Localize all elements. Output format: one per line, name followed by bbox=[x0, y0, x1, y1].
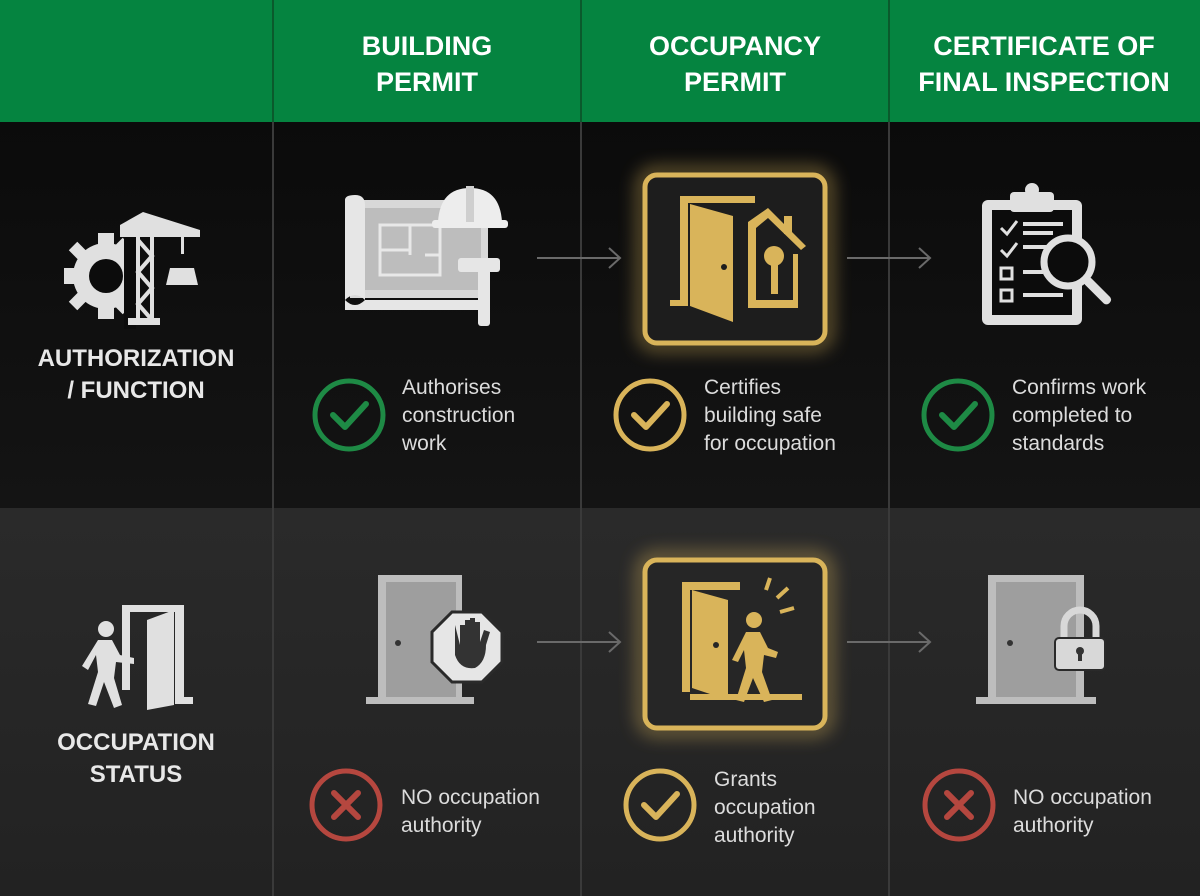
status: building permit row 1: Authorises bbox=[402, 376, 501, 399]
icon: occupancy door with walking person (glowing) bbox=[643, 558, 827, 730]
icon: gear and crane bbox=[64, 212, 200, 329]
row label: occupation status: STATUS bbox=[90, 761, 182, 788]
header: column titles: BUILDING bbox=[362, 31, 492, 61]
status: occupancy permit row 1: Certifies bbox=[704, 376, 781, 399]
status: occupancy permit row 1: building safe bbox=[704, 404, 822, 427]
status: occupancy permit row 1 bbox=[616, 376, 836, 455]
row label: authorization / function: AUTHORIZATION bbox=[38, 345, 234, 372]
status: occupancy permit row 2: Grants bbox=[714, 768, 777, 791]
row label: occupation status bbox=[57, 605, 215, 788]
status: building permit row 2: authority bbox=[401, 814, 482, 837]
header: column titles: PERMIT bbox=[684, 67, 787, 97]
status: final inspection row 1: completed to bbox=[1012, 404, 1132, 427]
status: occupancy permit row 2 bbox=[626, 768, 816, 847]
status: building permit row 1 bbox=[315, 376, 515, 455]
status: building permit row 2: NO occupation bbox=[401, 786, 540, 809]
row label: authorization / function bbox=[38, 212, 234, 404]
status: occupancy permit row 2: authority bbox=[714, 824, 795, 847]
header: column titles: FINAL INSPECTION bbox=[918, 67, 1170, 97]
icon: occupancy door/house/key (glowing) bbox=[643, 173, 827, 345]
status: building permit row 2 bbox=[312, 771, 540, 839]
status: final inspection row 2 bbox=[925, 771, 1152, 839]
icon: blueprint, helmet, hammer bbox=[345, 186, 508, 326]
status: final inspection row 1: Confirms work bbox=[1012, 376, 1147, 399]
icon: clipboard with magnifier bbox=[982, 183, 1113, 325]
status: occupancy permit row 1: for occupation bbox=[704, 432, 836, 455]
status: building permit row 1: work bbox=[401, 432, 447, 455]
row label: authorization / function: / FUNCTION bbox=[67, 377, 205, 404]
arrows bbox=[537, 248, 930, 652]
icon: door with stop hand bbox=[366, 575, 502, 704]
status: final inspection row 1 bbox=[924, 376, 1147, 455]
header: column titles: CERTIFICATE OF bbox=[933, 31, 1155, 61]
header: column titles: OCCUPANCY bbox=[649, 31, 821, 61]
icon: person entering door bbox=[82, 605, 193, 710]
header: column titles bbox=[362, 31, 1170, 97]
icon: door with padlock bbox=[976, 575, 1105, 704]
status: occupancy permit row 2: occupation bbox=[714, 796, 816, 819]
row label: occupation status: OCCUPATION bbox=[57, 729, 215, 756]
status: final inspection row 2: NO occupation bbox=[1013, 786, 1152, 809]
status: final inspection row 2: authority bbox=[1013, 814, 1094, 837]
header: column titles: PERMIT bbox=[376, 67, 479, 97]
status: final inspection row 1: standards bbox=[1012, 432, 1104, 455]
status: building permit row 1: construction bbox=[402, 404, 515, 427]
